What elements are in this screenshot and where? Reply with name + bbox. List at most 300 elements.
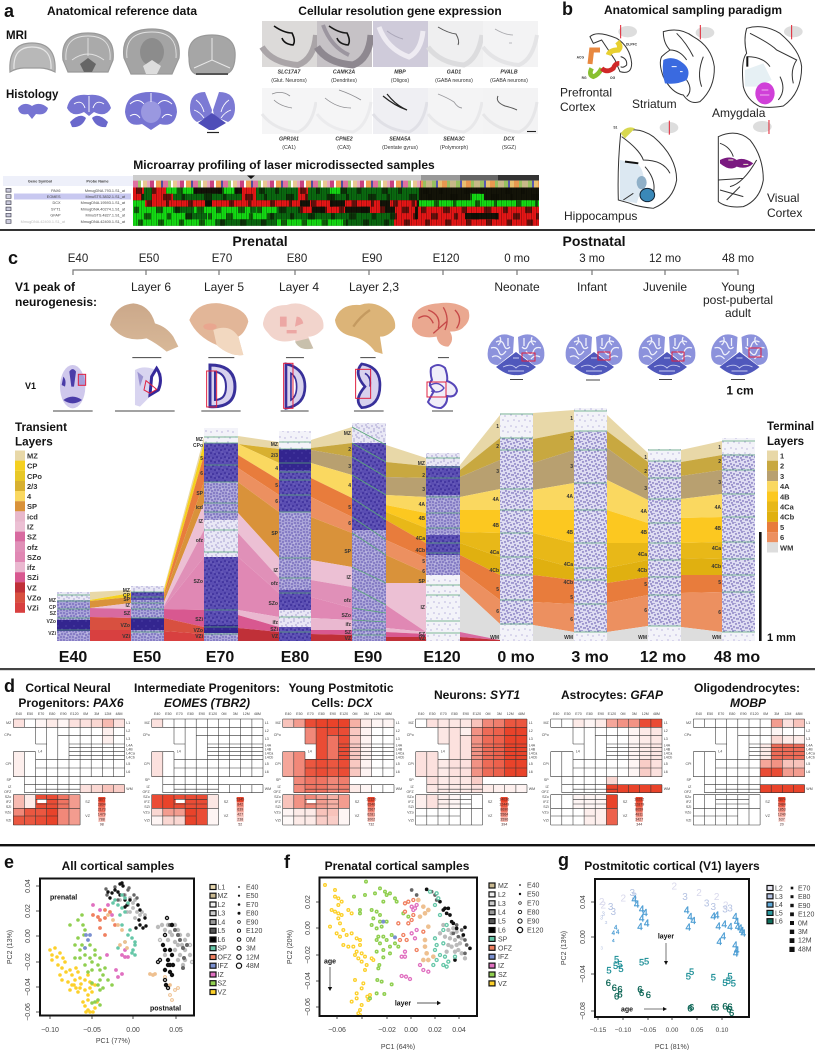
heat map: MOBP: OFZ: [684, 790, 692, 794]
scatter plot g with numeric layer markers: 3: [600, 945, 603, 950]
heat map: GFAP: L4Ca: [664, 752, 672, 756]
heat map: GFAP: MZ: [543, 721, 549, 725]
heat map: MOBP: SZi: [686, 805, 692, 809]
heat map: GFAP: 12M: [642, 712, 649, 716]
scatter plot g with numeric layer markers: 4: [637, 922, 643, 933]
heat map: DCX: SZi: [275, 805, 281, 809]
Nissl column E90: 5: [348, 505, 351, 511]
legend: transient layers: VZo: [27, 594, 42, 602]
heat map: MOBP: L4A: [806, 744, 813, 748]
scatter plot f: 0.00: [404, 1027, 418, 1034]
gene labels: (Dendrites): [331, 78, 357, 84]
heat map: DCX: E90: [330, 712, 336, 716]
V1 peak of neurogenesis label: V1 peak of: [15, 280, 76, 294]
heat map: MOBP: E120: [750, 712, 759, 716]
heat map: MOBP: 1240: [778, 812, 786, 816]
microarray gene table: GFAP: [50, 214, 61, 218]
heat map: EOMES: 52: [238, 822, 242, 826]
heat map: PAX6: E40: [16, 712, 22, 716]
legend: terminal layers: 4A: [780, 482, 790, 491]
gene labels: (Glut. Neurons): [271, 78, 307, 84]
heat map: MOBP: VZo: [685, 810, 691, 814]
age labels under columns: E40: [59, 649, 87, 666]
heat map: EOMES: L6: [265, 770, 269, 774]
heat map: DCX: 12M: [374, 712, 381, 716]
region labels: Visual: [767, 191, 799, 205]
heat map: MOBP: IFZ: [686, 800, 692, 804]
heat map: MOBP: L4Ca: [806, 752, 815, 756]
Nissl column E120: MZ: [418, 461, 425, 467]
heat map: EOMES: 5345: [236, 798, 244, 802]
heat map: GFAP: L4: [576, 750, 580, 754]
Nissl column E70: SZi: [195, 617, 204, 623]
heat map: DCX: 7567: [367, 808, 375, 812]
age labels under columns: 3 mo: [571, 649, 609, 666]
legend e: layers and ages: E50: [246, 893, 259, 900]
heat map: PAX6: L4B: [126, 748, 133, 752]
gene labels: SEMA3C: [443, 136, 465, 142]
heat map titles: Astrocytes: GFAP: [561, 688, 664, 702]
legend f: layers and ages: SZ: [498, 972, 508, 979]
heat map: GFAP: 12879: [634, 802, 644, 806]
legend: transient layers: SP: [27, 502, 37, 511]
Nissl column 0 mo: 3: [496, 469, 499, 475]
Nissl column E90: [342, 423, 386, 642]
timeline ages: E120: [433, 253, 459, 265]
heat map: SYT1: 12449: [499, 802, 509, 806]
Nissl column 12 mo: 5: [644, 582, 647, 588]
scatter plot g with numeric layer markers: 5: [644, 956, 649, 966]
scatter plot g with numeric layer markers: 6: [637, 985, 643, 995]
Nissl column 3 mo: 4Ca: [564, 562, 573, 568]
heat map: SYT1: 12M: [507, 712, 514, 716]
heading: postmitotic V1 layers: Postmitotic cortical (V1) layers: [584, 859, 760, 873]
Nissl column E70: SP: [196, 491, 204, 497]
heat map: SYT1: E90: [463, 712, 469, 716]
scatter plot f: −0.06: [305, 998, 312, 1016]
heat map: PAX6: WM: [126, 787, 133, 791]
legend: transient layers: Transient: [15, 421, 67, 434]
heat map: EOMES: 48M: [254, 712, 261, 716]
microarray gene table: MmuSTS.3832.1.S1_at: [86, 195, 126, 199]
heat map: MOBP: 12M: [784, 712, 791, 716]
heat map: GFAP: SP: [544, 778, 549, 782]
scatter plot g with numeric layer markers: 5: [614, 955, 619, 965]
gene labels: (CA1): [282, 145, 296, 151]
heat map: GFAP: L4Cb: [664, 756, 672, 760]
heat map: DCX: IZ: [277, 785, 281, 789]
scatter plot g with numeric layer markers: 3: [722, 905, 728, 916]
heat map: DCX: L4Cb: [396, 756, 404, 760]
heat map: SYT1: OFZ: [407, 790, 415, 794]
Nissl column E90: IZ: [347, 575, 351, 581]
Nissl column E80: IZ: [274, 568, 278, 574]
scatter plot g with numeric layer markers: 6: [614, 991, 619, 1001]
heat map: MOBP: CPi: [686, 762, 691, 766]
heat map: EOMES: E40: [154, 712, 160, 716]
scatter plot g with numeric layer markers: 4: [741, 929, 747, 940]
heat map: MOBP: 3M: [774, 712, 779, 716]
stage labels: Infant: [577, 280, 608, 294]
microarray gene table: MmugDNA.19593.1.S1_at: [81, 201, 126, 205]
heat map titles: MOBP: [730, 696, 767, 710]
heat map: EOMES: SZi: [144, 805, 150, 809]
legend e: layers and ages: E90: [246, 920, 259, 926]
stage labels: Young: [721, 280, 755, 294]
scatter plot e: postnatal: [150, 1006, 181, 1012]
gene labels: SLC17A7: [278, 70, 302, 76]
age labels under columns: 12 mo: [640, 649, 686, 666]
prenatal V1 sections: [53, 363, 457, 411]
heat map: EOMES: VZ: [224, 814, 229, 818]
Nissl column E50: SP: [123, 597, 131, 603]
heat map: PAX6: L5: [126, 762, 130, 766]
timeline ages: 3 mo: [579, 253, 605, 265]
legend f: layers and ages: OFZ: [498, 945, 513, 952]
legend e: layers and ages: [210, 884, 262, 996]
scatter plot g with numeric layer markers: 4: [686, 923, 692, 934]
heat map: MOBP: SZ: [765, 800, 771, 804]
heat map: DCX: 0M: [353, 712, 358, 716]
scatter plot g with numeric layer markers: 4: [714, 910, 720, 921]
legend f: layers and ages: IZ: [498, 963, 505, 970]
Nissl column E120: 4B: [419, 516, 425, 522]
legend e: layers and ages: L5: [218, 928, 225, 935]
gene labels: (Dentate gyrus): [382, 145, 418, 151]
heat map: SYT1: E50: [429, 712, 436, 716]
Nissl column 3 mo: 4Cb: [564, 580, 573, 586]
scatter plot g with numeric layer markers: 3: [630, 888, 636, 899]
heat map: EOMES: L4: [177, 750, 181, 754]
legend: transient layers: CPo: [27, 472, 42, 481]
scatter plot g with numeric layer markers: 3: [682, 892, 688, 903]
scatter plot g with numeric layer markers: 6: [722, 1001, 728, 1011]
heat map: DCX: E80: [318, 712, 325, 716]
scatter plot e: PC2 (13%): [7, 930, 14, 964]
row label MRI: MRI: [6, 30, 27, 42]
panel letter a: a: [4, 1, 15, 21]
Nissl column 0 mo: 4B: [493, 523, 499, 529]
heat map: MOBP: E70: [718, 712, 724, 716]
heat map: MOBP: E50: [707, 712, 713, 716]
brain: hippocampus: S1: [613, 126, 618, 130]
heat map: DCX: L2: [396, 729, 400, 733]
scatter plot g with numeric layer markers: 5: [617, 959, 623, 969]
legend: transient layers: VZi: [27, 604, 39, 613]
scatter plot g with numeric layer markers: 4: [732, 940, 738, 951]
legend g: layers and ages: [767, 886, 814, 953]
brain: prefrontal cortex: DLPFC: [626, 42, 638, 46]
scatter plot g with numeric layer markers: 5: [727, 971, 733, 981]
heat map: PAX6: SP: [7, 778, 12, 782]
heat map: GFAP: L4B: [664, 748, 671, 752]
small inset brains with section lines: [618, 25, 803, 135]
heat map: DCX: L4B: [396, 748, 403, 752]
legend f: layers and ages: E40: [527, 882, 540, 890]
heat map: DCX: 3M: [364, 712, 369, 716]
Nissl column E80: SP: [271, 531, 279, 537]
heat map: MOBP: L4B: [806, 748, 813, 752]
timeline ages: 0 mo: [504, 253, 530, 265]
timeline ages: 48 mo: [722, 253, 754, 265]
row label histology: Histology: [6, 89, 59, 101]
microarray gene table: DCX: [52, 201, 61, 205]
heat map: SYT1: L4Cb: [529, 756, 537, 760]
Nissl column 0 mo: 4A: [493, 497, 499, 503]
brain: striatum: [660, 30, 714, 102]
Nissl column 3 mo: 4B: [567, 530, 573, 536]
heat map: DCX: 6281: [367, 812, 375, 816]
scale bar 1 mm: 1 mm: [767, 632, 796, 644]
heat map: EOMES: L5: [265, 762, 269, 766]
heat map: MOBP: L2: [806, 729, 810, 733]
legend f: layers and ages: E50: [527, 892, 540, 898]
Nissl column E70: IZ: [199, 519, 203, 525]
heat map: GFAP: 3M: [632, 712, 637, 716]
Nissl column E90: 6: [348, 521, 351, 527]
legend: transient layers: SZo: [27, 553, 42, 562]
scatter plot g with numeric layer markers: 2: [714, 892, 720, 903]
Nissl column 0 mo: 2: [496, 444, 499, 450]
heat map: EOMES: OFZ: [143, 790, 151, 794]
scatter plot g with numeric layer markers: 5: [613, 961, 618, 971]
heat map: SYT1: CPo: [407, 733, 414, 737]
0 mo to 3 mo: [533, 410, 574, 641]
scatter plot g with numeric layer markers: 5: [722, 978, 728, 988]
Nissl column E50: IZ: [126, 603, 130, 609]
E40 to E50: [90, 590, 131, 641]
heat map: DCX: [274, 712, 404, 826]
Nissl column 12 mo: 4A: [641, 509, 647, 515]
Nissl column 0 mo: [490, 413, 533, 641]
legend e: layers and ages: OFZ: [218, 954, 232, 962]
heat map: SYT1: MZ: [408, 721, 414, 725]
legend e: layers and ages: E70: [246, 902, 259, 909]
microarray gene table: MmugDNA.42400.1.S1_at: [21, 220, 66, 224]
heat map: DCX: VZo: [274, 810, 281, 814]
Nissl column E50: [121, 586, 164, 641]
heat map: PAX6: 788: [99, 818, 105, 822]
heat map: GFAP: SZ: [623, 800, 628, 804]
scatter plot g with numeric layer markers: −0.10: [615, 1027, 632, 1034]
scatter plot e: 0.00: [126, 1027, 140, 1034]
gene labels: (Polymorph): [440, 145, 468, 151]
scatter plot g with numeric layer markers: 6: [714, 1003, 719, 1013]
heat map: GFAP: VZo: [542, 810, 549, 814]
layer bands between columns: [90, 410, 722, 641]
panel letter e: e: [4, 852, 14, 872]
Nissl column E90: MZ: [344, 431, 351, 437]
legend: transient layers: VZ: [27, 583, 37, 592]
heat map: PAX6: 3877: [98, 798, 106, 802]
heat map: SYT1: L4B: [529, 748, 536, 752]
heat map: EOMES: 0M: [222, 712, 226, 716]
heat map: MOBP: E80: [729, 712, 735, 716]
heat map: SYT1: 48M: [518, 712, 525, 716]
heat map: SYT1: E70: [440, 712, 447, 716]
scatter plot g with numeric layer markers: −0.04: [580, 965, 587, 983]
Nissl column 12 mo: 4B: [641, 530, 647, 536]
Nissl column E90: 2: [348, 447, 351, 453]
heat map: EOMES: IFZ: [144, 800, 151, 804]
heat map: EOMES: [143, 712, 273, 826]
scatter plot g with numeric layer markers: 6: [617, 985, 623, 995]
heat map: EOMES: E80: [187, 712, 194, 716]
legend f: layers and ages: E80: [527, 910, 540, 916]
scatter plot g with numeric layer markers: −0.05: [640, 1027, 657, 1034]
scatter plot e: 0.02: [25, 904, 32, 918]
Nissl column E90: ifz: [345, 622, 351, 628]
scatter plot g with numeric layer markers: 4: [734, 917, 740, 928]
Nissl column 48 mo: 4Cb: [712, 564, 721, 570]
scatter plot g with numeric layer markers: 6: [687, 1004, 693, 1014]
scatter plot g with numeric layer markers: 4: [727, 922, 733, 933]
heat map: SYT1: VZi: [408, 818, 414, 822]
timeline ages: [68, 253, 754, 275]
heat map: GFAP: OFZ: [542, 790, 550, 794]
postnatal V1 sections: [488, 334, 768, 380]
legend: terminal layers: 4Ca: [780, 502, 795, 512]
legend g: layers and ages: L6: [775, 919, 783, 926]
Nissl column E80: 2/3: [271, 453, 278, 459]
heat map: GFAP: E40: [553, 712, 559, 716]
heat map: SYT1: SP: [409, 778, 414, 782]
E90 to E120: [386, 445, 426, 641]
heat map: PAX6: CPo: [4, 733, 11, 737]
heat map: MOBP: L4: [718, 750, 722, 754]
Nissl column E70: [193, 428, 238, 641]
heat map: PAX6: 0M: [83, 712, 88, 716]
heat map: SYT1: L3: [529, 737, 533, 741]
brain: prefrontal cortex: RG: [582, 76, 587, 80]
scatter plot g with numeric layer markers: 4: [721, 931, 727, 942]
Nissl column E120: IZ: [421, 605, 425, 611]
heat map: PAX6: E120: [70, 712, 79, 716]
heat map: GFAP: 10292: [634, 798, 644, 802]
Nissl column 3 mo: 6: [570, 617, 573, 623]
Nissl column E70: 6: [200, 471, 203, 477]
heat map: PAX6: L1: [126, 721, 130, 725]
legend e: layers and ages: 12M: [246, 954, 260, 962]
heat map: EOMES: 238: [237, 818, 243, 822]
heat map: PAX6: VZ: [85, 814, 91, 818]
scatter plot e: −0.05: [83, 1027, 101, 1034]
heat map: GFAP: WM: [664, 787, 670, 791]
legend e: layers and ages: SP: [218, 946, 227, 953]
Nissl column E40: SZ: [50, 611, 56, 617]
Nissl column 12 mo: 4Ca: [638, 552, 647, 558]
legend e: layers and ages: E40: [246, 884, 259, 892]
heat map: MOBP: 637: [779, 818, 785, 822]
Nissl column 48 mo: 2: [718, 459, 721, 465]
timeline ages: 12 mo: [649, 253, 681, 265]
heat map: PAX6: 48M: [115, 712, 122, 716]
Nissl column 0 mo: 1: [496, 424, 499, 430]
scatter plot g with numeric layer markers: 6: [689, 1003, 694, 1013]
heat map: MOBP: CPo: [684, 733, 691, 737]
heading: prenatal cortical samples: Prenatal cortical samples: [325, 859, 470, 873]
scatter plot g with numeric layer markers: 6: [606, 978, 611, 988]
stage labels: Layer 2,3: [349, 280, 399, 294]
heat map: GFAP: VZ: [623, 814, 628, 818]
scatter plot g with numeric layer markers: 6: [711, 1003, 716, 1013]
age labels under columns: [59, 649, 760, 666]
scatter plot f: 0.00: [305, 921, 312, 935]
scatter plot e: −0.04: [25, 978, 32, 996]
heat map: GFAP: L1: [664, 721, 668, 725]
scatter plot g with numeric layer markers: 2: [672, 881, 678, 892]
Nissl column 3 mo: 5: [570, 595, 573, 601]
heat map: SYT1: L5: [529, 762, 533, 766]
Nissl column 3 mo: 1: [570, 416, 573, 422]
Nissl column 0 mo: 4Ca: [490, 550, 499, 556]
heat map: SYT1: IZ: [410, 785, 414, 789]
scatter plot g with numeric layer markers: 3: [632, 891, 638, 902]
scatter plot g with numeric layer markers: 5: [686, 971, 691, 981]
V1 label: V1: [25, 381, 36, 391]
Nissl column E120: 4A: [419, 502, 425, 508]
heat map: SYT1: IFZ: [408, 800, 415, 804]
microarray gene table: Probe Name: [86, 180, 109, 184]
postnatal heading: Postnatal: [562, 233, 626, 249]
legend e: layers and ages: VZ: [218, 990, 227, 996]
legend g: layers and ages: L5: [775, 910, 783, 917]
heat map: DCX: E120: [340, 712, 348, 716]
scatter plot g with numeric layer markers: 0.04: [580, 895, 587, 909]
legend e: layers and ages: IZ: [218, 972, 224, 979]
scatter plot g with numeric layer markers: 0.05: [691, 1027, 704, 1034]
heat map: SYT1: 5564: [500, 812, 508, 816]
scatter plot e: −0.10: [41, 1027, 59, 1034]
heat map: EOMES: E90: [199, 712, 205, 716]
scatter plot g with numeric layer markers: 6: [646, 990, 651, 1000]
Nissl column E70: CPo: [193, 443, 203, 449]
legend f: layers and ages: E90: [527, 918, 540, 926]
heat map: GFAP: E50: [564, 712, 571, 716]
heat map: GFAP: 3427: [635, 818, 643, 822]
gene labels: MBP: [394, 70, 406, 76]
heat map: SYT1: L1: [529, 721, 533, 725]
legend e: layers and ages: MZ: [218, 893, 228, 900]
microarray gene table: Gene Symbol: [28, 180, 52, 184]
scatter plot g with numeric layer markers: 4: [642, 908, 648, 919]
heat map: PAX6: SZo: [5, 795, 11, 799]
heat map: EOMES: 639: [237, 808, 243, 812]
heat map: EOMES: L3: [265, 737, 269, 741]
heat map: SYT1: SZ: [488, 800, 493, 804]
legend: terminal layers: 4Cb: [780, 513, 795, 522]
scatter plot g with numeric layer markers: 5: [606, 965, 612, 975]
legend: transient layers: SZ: [27, 533, 37, 542]
scatter plot g with numeric layer markers: −0.08: [580, 1002, 587, 1020]
Nissl column E80: ofz: [271, 581, 278, 587]
scatter plot g with numeric layer markers: 4: [711, 911, 717, 922]
heat map: MOBP: 2484: [778, 802, 786, 806]
scatter plot g with numeric layer markers: 6: [617, 990, 623, 1000]
Nissl column 0 mo: 6: [496, 609, 499, 615]
Nissl column 12 mo: [638, 449, 681, 641]
heat map: EOMES: CPo: [143, 733, 150, 737]
scatter plot g with numeric layer markers: 4: [735, 922, 741, 933]
heat map: DCX: L1: [396, 721, 400, 725]
heat map: GFAP: E90: [598, 712, 604, 716]
heat map: PAX6: E70: [38, 712, 44, 716]
Nissl column E120: [416, 453, 460, 642]
Nissl column E80: 5: [275, 483, 278, 489]
panel g: PCA of postmitotic V1 layers: [558, 850, 814, 1050]
legend f: layers and ages: L6: [498, 928, 506, 934]
region labels: Prefrontal: [560, 86, 612, 100]
